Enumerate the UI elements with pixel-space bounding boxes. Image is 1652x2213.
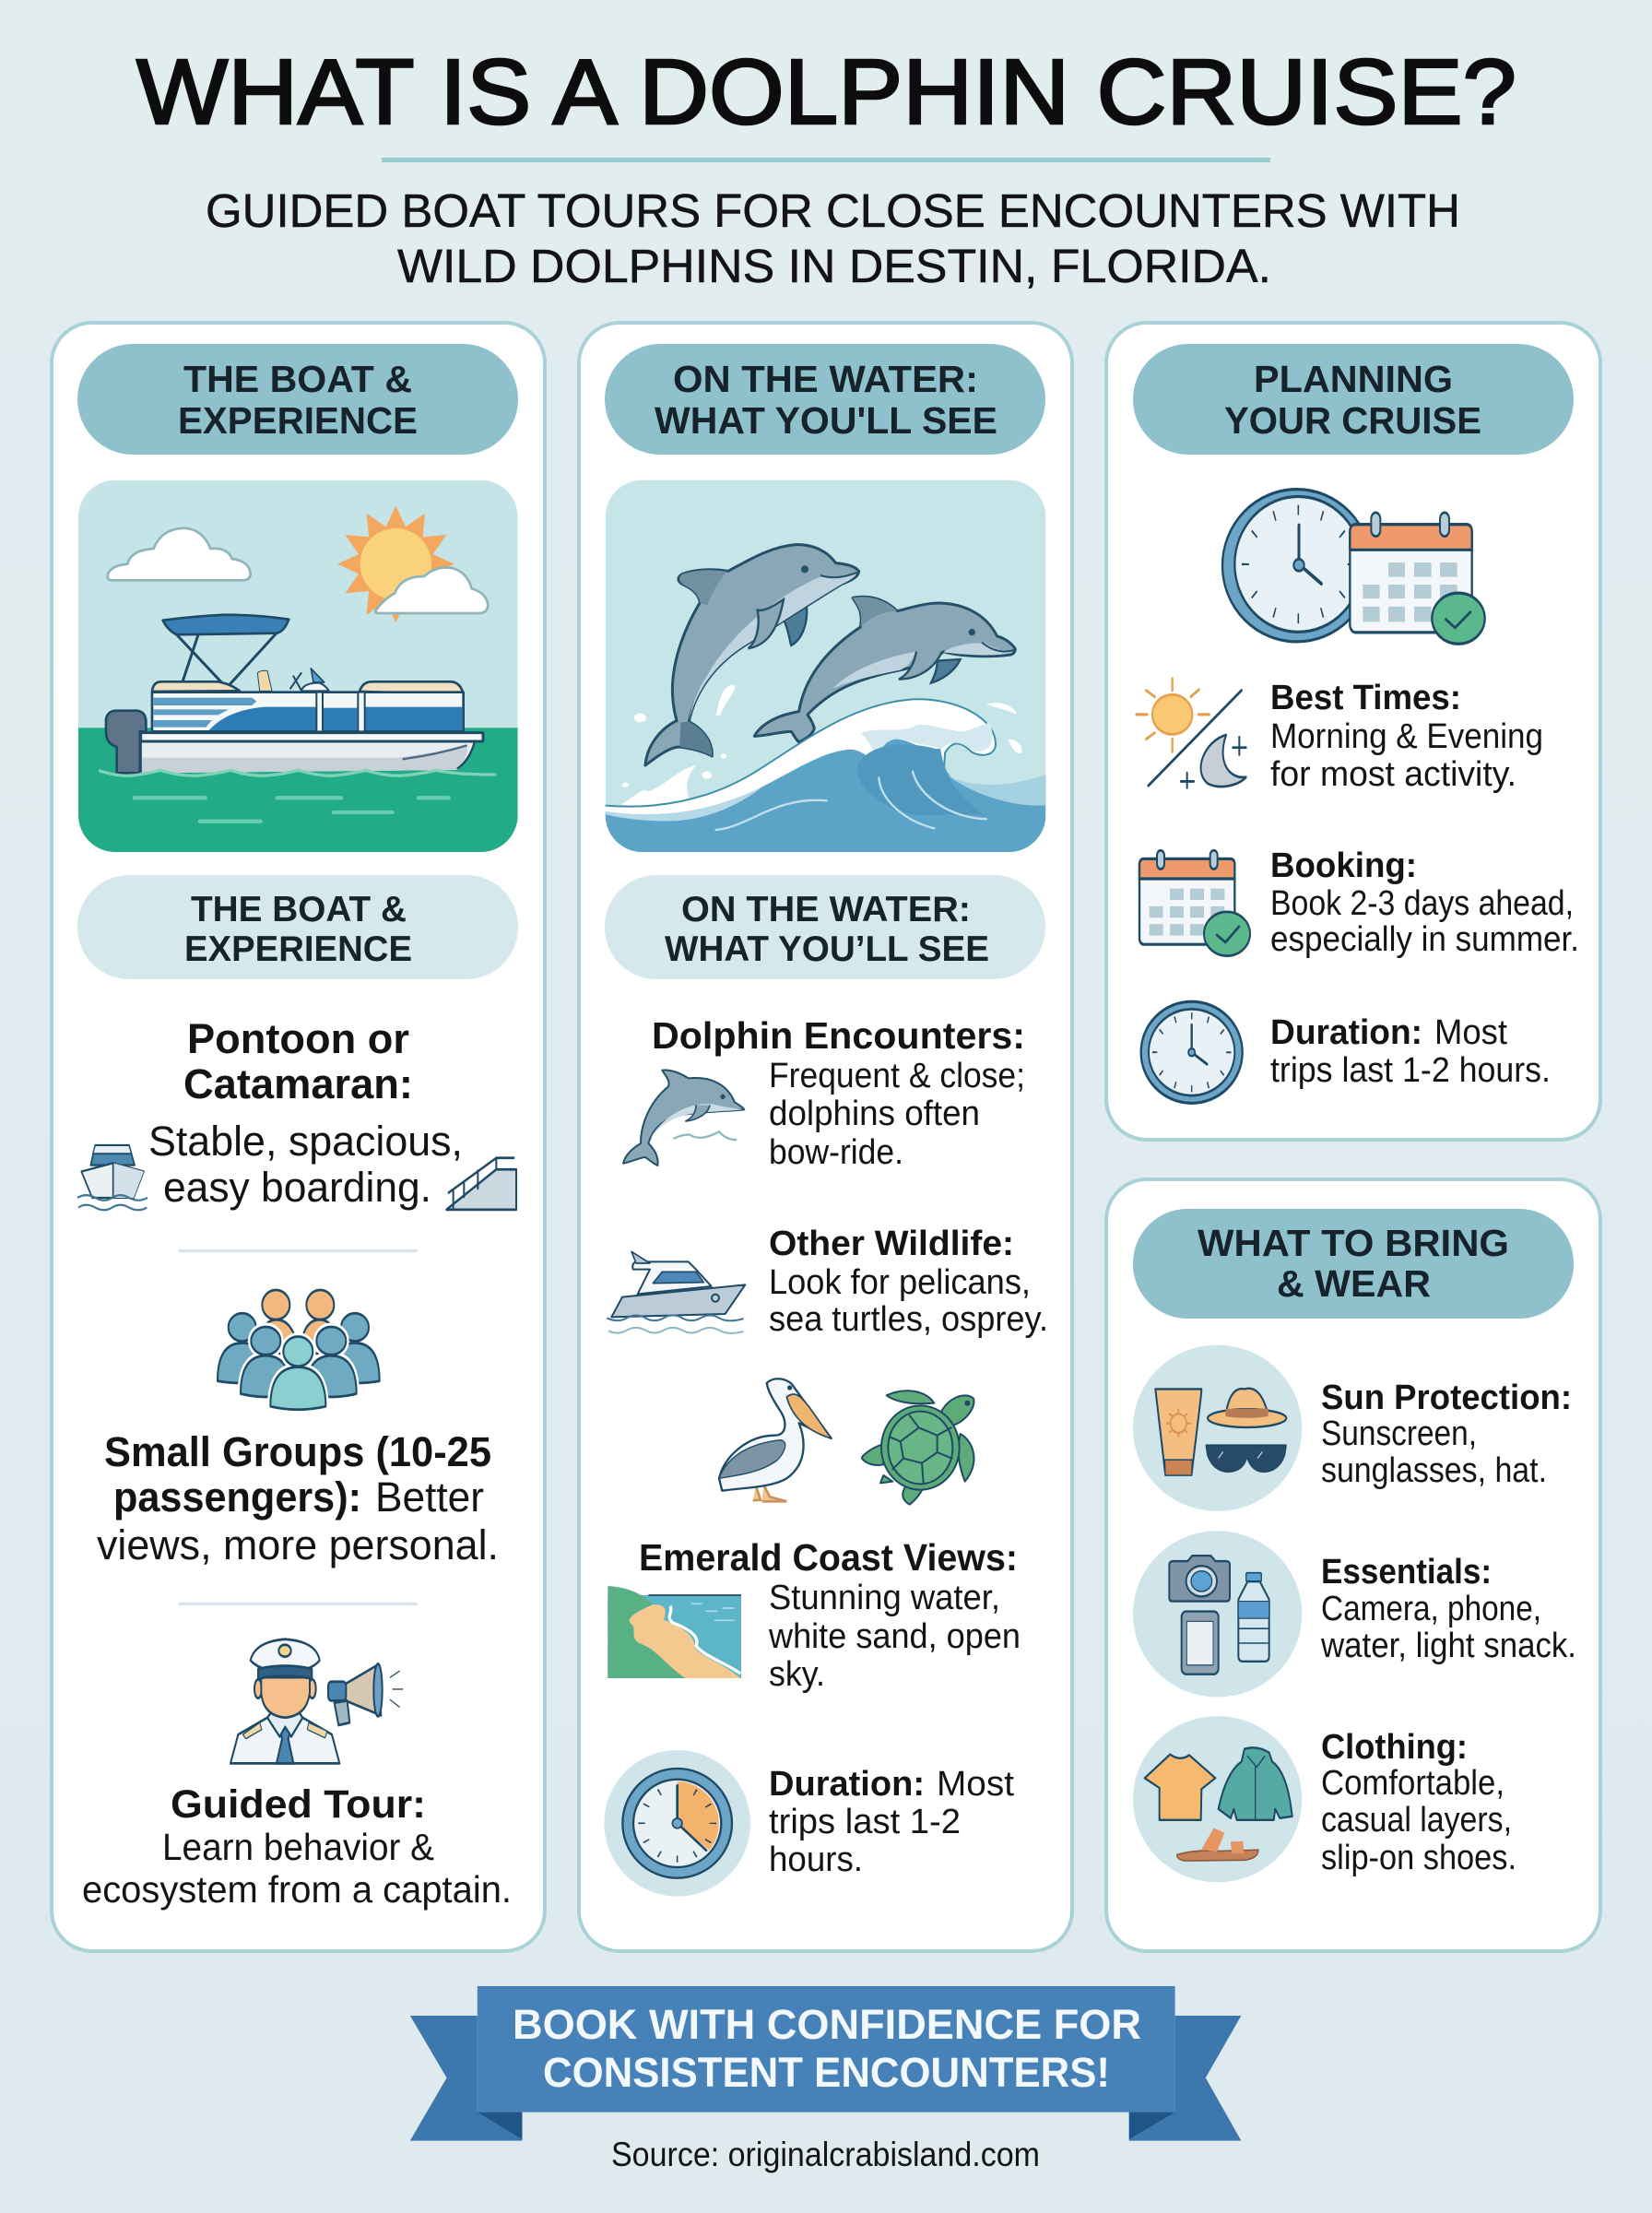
heading pill: what to bring and wear [1133, 1209, 1574, 1319]
sub-heading pill: on the water: WHAT YOU’LL SEE [665, 929, 989, 969]
icon: clothing circle [1133, 1716, 1302, 1882]
text: booking [1270, 846, 1579, 959]
text: emerald coast views: Stunning water, [769, 1579, 1000, 1617]
subtitle [206, 184, 1460, 292]
text: duration: Most [1434, 1013, 1507, 1052]
dolphin front [931, 659, 961, 683]
text: essentials: water, light snack. [1320, 1627, 1576, 1665]
text: dolphin encounters: dolphins often [769, 1095, 980, 1133]
title: WHAT IS A DOLPHIN CRUISE? [136, 41, 1516, 144]
text: pontoon or catamaran: Catamaran: [183, 1060, 413, 1107]
text: pontoon or catamaran [148, 1015, 463, 1211]
text: sun protection: sunglasses, hat. [1321, 1451, 1547, 1490]
icon: group of people [218, 1290, 380, 1410]
heading pill: the boat and experience: EXPERIENCE [178, 399, 418, 442]
text: emerald coast views: white sand, open [768, 1617, 1021, 1656]
text: clothing [1321, 1728, 1516, 1877]
text: guided tour: Learn behavior & [162, 1826, 434, 1868]
text: booking: Booking: [1270, 846, 1417, 885]
icon: boarding ramp [446, 1158, 516, 1210]
text: small groups: Better [375, 1473, 484, 1521]
icon: small boat [77, 1145, 148, 1210]
text: other wildlife [769, 1225, 1048, 1339]
text: duration: hours. [769, 1840, 863, 1879]
text: best times [1270, 679, 1543, 794]
text: clothing: Comfortable, [1321, 1764, 1504, 1803]
text: sun protection: Sun Protection: [1321, 1379, 1572, 1417]
text: clothing: slip-on shoes. [1321, 1839, 1516, 1877]
icon: captain with megaphone [230, 1639, 403, 1763]
text: small groups: Small Groups (10-25 [104, 1428, 491, 1475]
subtitle: WILD DOLPHINS IN DESTIN, FLORIDA. [397, 240, 1271, 292]
text: duration: trips last 1-2 hours. [1270, 1051, 1551, 1090]
icon: pelican [719, 1379, 832, 1501]
heading pill: the boat and experience: THE BOAT & [183, 358, 412, 400]
text: duration: Most [937, 1765, 1014, 1804]
text: other wildlife: sea turtles, osprey. [769, 1300, 1048, 1339]
ribbon banner: CONSISTENT ENCOUNTERS! [543, 2049, 1110, 2096]
text: guided tour: Guided Tour: [171, 1782, 426, 1827]
text: duration: trips last 1-2 [769, 1803, 961, 1841]
text: best times: Best Times: [1270, 679, 1461, 717]
sub-heading pill: on the water: ON THE WATER: [681, 890, 971, 929]
icon: booking calendar [1139, 850, 1250, 956]
panel: planning your cruise [1106, 323, 1600, 1140]
ribbon banner [410, 1986, 1241, 2141]
text: best times: Morning & Evening [1270, 717, 1543, 756]
text: emerald coast views [639, 1536, 1021, 1694]
heading pill: planning your cruise: PLANNING [1254, 358, 1453, 400]
text: dolphin encounters: bow-ride. [769, 1133, 903, 1172]
heading pill: what to bring and wear: WHAT TO BRING [1198, 1222, 1509, 1264]
text: duration: Duration: [1270, 1013, 1422, 1052]
icon: essentials circle [1133, 1531, 1302, 1698]
source line: Source: originalcrabisland.com [611, 2136, 1040, 2173]
icon: sun and moon [1137, 679, 1246, 787]
icon: sun protection circle [1133, 1345, 1302, 1511]
text: duration: Duration: [769, 1765, 925, 1804]
dolphin rear [784, 606, 807, 645]
text: dolphin encounters [652, 1014, 1025, 1172]
text: small groups: views, more personal. [97, 1521, 499, 1568]
text: guided tour: ecosystem from a captain. [82, 1868, 512, 1911]
text: duration [1270, 1013, 1551, 1090]
icon: coastline [608, 1586, 741, 1678]
text: pontoon or catamaran: Stable, spacious, [148, 1118, 463, 1165]
text: best times: for most activity. [1270, 755, 1516, 794]
text: dolphin encounters: Dolphin Encounters: [652, 1014, 1025, 1057]
text: other wildlife: Other Wildlife: [769, 1225, 1014, 1263]
text: essentials: Camera, phone, [1321, 1590, 1541, 1628]
heading pill: on the water [605, 344, 1045, 455]
panel: the boat and experience [52, 323, 545, 1951]
text: booking: especially in summer. [1270, 920, 1579, 959]
illustration: two leaping dolphins over a wave [602, 480, 1045, 852]
heading pill: the boat and experience [77, 344, 518, 455]
text: emerald coast views: sky. [769, 1655, 825, 1694]
text: booking: Book 2-3 days ahead, [1270, 884, 1574, 923]
illustration: pontoon boat on emerald water [78, 480, 518, 854]
heading pill: on the water: ON THE WATER: [673, 358, 978, 400]
text: other wildlife: Look for pelicans, [769, 1263, 1031, 1302]
icon: small yacht [607, 1251, 745, 1333]
sub-heading pill: on the water [605, 875, 1045, 979]
text: sun protection: Sunscreen, [1321, 1414, 1477, 1453]
heading pill: planning your cruise [1133, 344, 1574, 455]
text: pontoon or catamaran: Pontoon or [187, 1015, 409, 1062]
text: clothing: casual layers, [1321, 1801, 1512, 1840]
text: emerald coast views: Emerald Coast Views: [639, 1536, 1018, 1579]
text: dolphin encounters: Frequent & close; [769, 1057, 1025, 1095]
sub-heading pill: the boat and experience [77, 875, 518, 979]
sub-heading pill: the boat and experience: THE BOAT & [191, 890, 407, 929]
icon: small clock [1141, 1001, 1243, 1103]
panel: what to bring and wear [1106, 1179, 1600, 1951]
icon: sea turtle [862, 1391, 974, 1505]
text: small groups [97, 1428, 499, 1568]
wave [605, 698, 997, 815]
text: duration [769, 1765, 1014, 1879]
text: essentials: Essentials: [1321, 1553, 1492, 1592]
text: clothing: Clothing: [1321, 1728, 1468, 1767]
subtitle: GUIDED BOAT TOURS FOR CLOSE ENCOUNTERS WITH [206, 184, 1460, 237]
heading pill: planning your cruise: YOUR CRUISE [1224, 399, 1481, 442]
heading pill: what to bring and wear: & WEAR [1277, 1262, 1431, 1305]
text: guided tour [82, 1782, 512, 1911]
text: pontoon or catamaran: easy boarding. [163, 1164, 431, 1211]
icon: clock and calendar [1222, 490, 1485, 644]
text: small groups: passengers): [113, 1473, 361, 1521]
panel: on the water [579, 323, 1072, 1951]
heading pill: on the water: WHAT YOU'LL SEE [655, 399, 997, 442]
text: essentials [1320, 1553, 1576, 1665]
icon: small dolphin [623, 1070, 744, 1166]
text: sun protection [1321, 1379, 1572, 1490]
icon: duration clock with orange wedge [604, 1750, 750, 1897]
sub-heading pill: the boat and experience: EXPERIENCE [184, 929, 412, 969]
ribbon banner: BOOK WITH CONFIDENCE FOR [513, 2001, 1141, 2048]
